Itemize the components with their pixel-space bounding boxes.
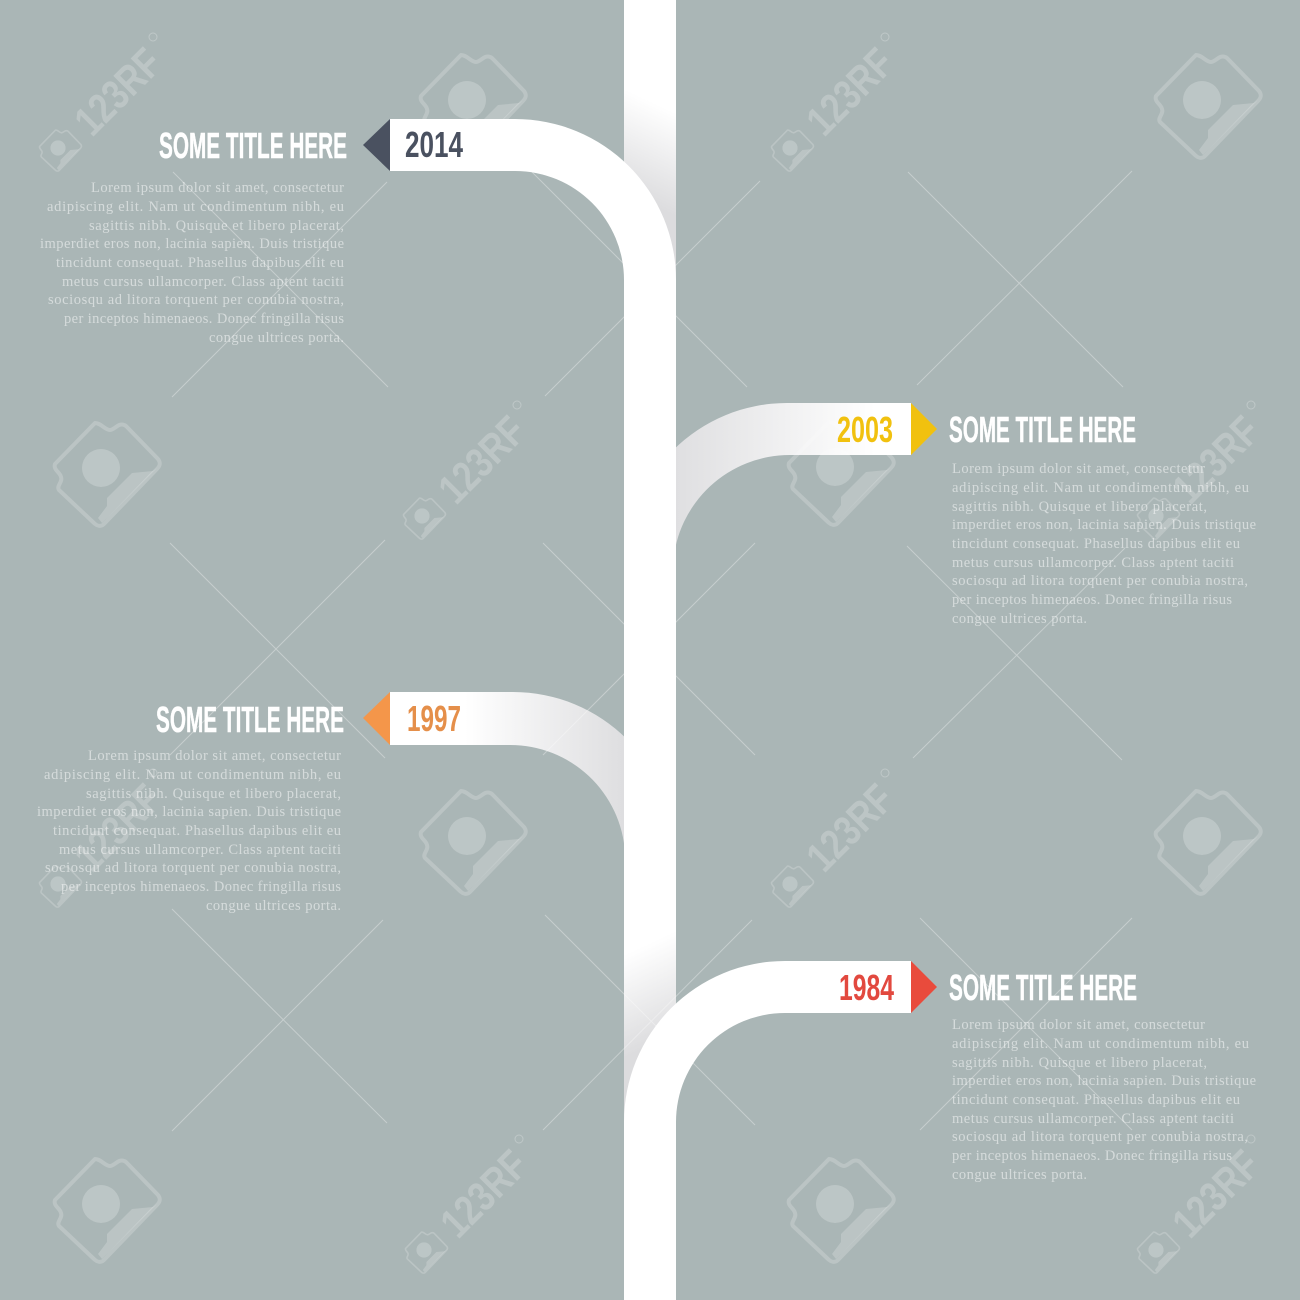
text block: 2014: sociosqu ad litora torquent per conubia nostra,: [48, 292, 344, 308]
watermark layer: 123RF: [1163, 407, 1268, 512]
watermark layer: 123RF: [429, 407, 534, 512]
text block: 2003: sagittis nibh. Quisque et libero placerat,: [952, 499, 1207, 515]
year: 2014: 2014: [405, 124, 463, 165]
text block: 2014: sagittis nibh. Quisque et libero placerat,: [89, 218, 344, 234]
text block: 1984: [952, 1017, 1256, 1183]
text block: 2014: [40, 180, 344, 346]
text block: 1984: sagittis nibh. Quisque et libero placerat,: [952, 1055, 1207, 1071]
text block: 1984: metus cursus ullamcorper. Class aptent taciti: [952, 1111, 1234, 1127]
text block: 1997: Lorem ipsum dolor sit amet, consectetur: [88, 748, 341, 764]
text block: 1984: sociosqu ad litora torquent per conubia nostra,: [952, 1129, 1248, 1145]
text block: 1997: metus cursus ullamcorper. Class aptent taciti: [59, 842, 341, 858]
text block: 1984: tincidunt consequat. Phasellus dapibus elit eu: [952, 1092, 1240, 1108]
text block: 2014: metus cursus ullamcorper. Class aptent taciti: [62, 274, 344, 290]
column shadow: 2014: [624, 90, 676, 280]
vertical timeline column: [624, 0, 676, 1300]
text block: 2003: tincidunt consequat. Phasellus dapibus elit eu: [952, 536, 1240, 552]
text block: 2014: per inceptos himenaeos. Donec fringilla risus: [64, 311, 344, 327]
text block: 1984: Lorem ipsum dolor sit amet, consectetur: [952, 1017, 1205, 1033]
text block: 2014: imperdiet eros non, lacinia sapien. Duis tristique: [40, 236, 344, 252]
arrow: 1997: [363, 692, 390, 745]
text block: 1997: sagittis nibh. Quisque et libero placerat,: [86, 786, 341, 802]
band: 2003 connector: [626, 403, 911, 564]
watermark layer: 123RF: [431, 1141, 536, 1246]
title: 2003: SOME TITLE HERE: [949, 409, 1136, 450]
title: 2014: SOME TITLE HERE: [159, 125, 347, 166]
arrow: 2003: [911, 403, 937, 455]
text block: 2003: [952, 461, 1256, 627]
text block: 2014: congue ultrices porta.: [209, 330, 344, 346]
year: 1997: 1997: [407, 698, 461, 739]
text block: 1997: [37, 748, 341, 914]
arrow: 2014: [363, 119, 390, 171]
watermark layer: 123RF: [797, 775, 902, 880]
watermark layer: 123RF: [65, 39, 170, 144]
text block: 1997: imperdiet eros non, lacinia sapien. Duis tristique: [37, 804, 341, 820]
band: 1984 connector: [624, 961, 911, 1122]
watermark layer: 123RF: [1163, 1141, 1268, 1246]
year: 1984: 1984: [839, 967, 894, 1008]
title: 1997: SOME TITLE HERE: [156, 699, 344, 740]
text block: 2003: per inceptos himenaeos. Donec fringilla risus: [952, 592, 1232, 608]
text block: 2014: adipiscing elit. Nam ut condimentum nibh, eu: [47, 199, 344, 215]
text block: 1984: adipiscing elit. Nam ut condimentum nibh, eu: [952, 1036, 1249, 1052]
column shadow: 1984: [624, 932, 676, 1122]
year: 2003: 2003: [837, 409, 893, 450]
text block: 2003: imperdiet eros non, lacinia sapien. Duis tristique: [952, 517, 1256, 533]
text block: 2003: adipiscing elit. Nam ut condimentum nibh, eu: [952, 480, 1249, 496]
arrow: 1984: [911, 961, 937, 1013]
text block: 1997: adipiscing elit. Nam ut condimentum nibh, eu: [44, 767, 341, 783]
text block: 1997: tincidunt consequat. Phasellus dapibus elit eu: [53, 823, 341, 839]
title: 1984: SOME TITLE HERE: [949, 967, 1137, 1008]
band: 2014 connector: [390, 119, 676, 280]
text block: 1997: sociosqu ad litora torquent per conubia nostra,: [45, 860, 341, 876]
text block: 2003: congue ultrices porta.: [952, 611, 1087, 627]
text block: 1997: congue ultrices porta.: [206, 898, 341, 914]
text block: 2003: sociosqu ad litora torquent per conubia nostra,: [952, 573, 1248, 589]
text block: 1984: congue ultrices porta.: [952, 1167, 1087, 1183]
watermark layer: 123RF: [797, 39, 902, 144]
text block: 1997: per inceptos himenaeos. Donec fringilla risus: [61, 879, 341, 895]
text block: 2003: Lorem ipsum dolor sit amet, consectetur: [952, 461, 1205, 477]
watermark layer: 123RF: [65, 775, 170, 880]
band: 1997 connector: [390, 692, 674, 853]
text block: 2003: metus cursus ullamcorper. Class aptent taciti: [952, 555, 1234, 571]
text block: 1984: per inceptos himenaeos. Donec fringilla risus: [952, 1148, 1232, 1164]
text block: 2014: Lorem ipsum dolor sit amet, consectetur: [91, 180, 344, 196]
text block: 1984: imperdiet eros non, lacinia sapien. Duis tristique: [952, 1073, 1256, 1089]
text block: 2014: tincidunt consequat. Phasellus dapibus elit eu: [56, 255, 344, 271]
